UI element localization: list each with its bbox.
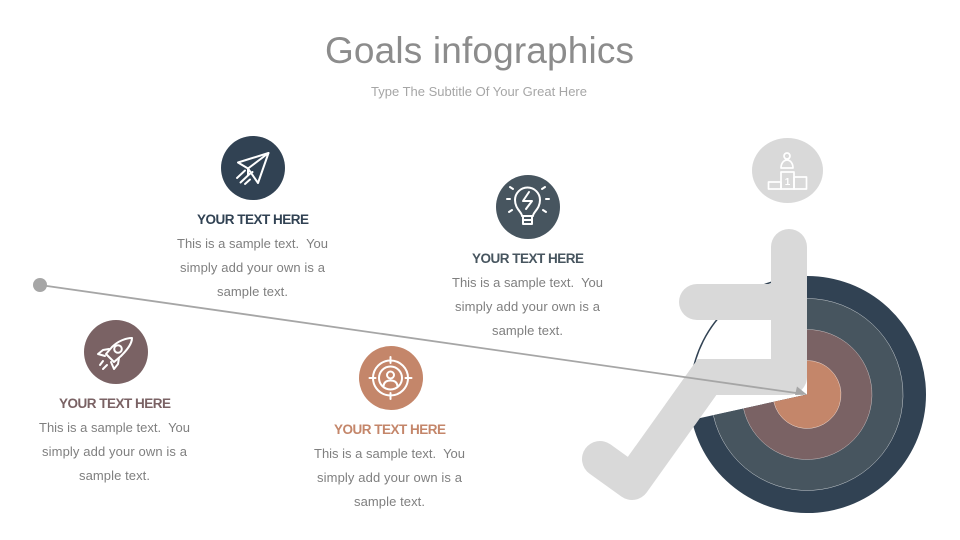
panel: top-left goal: [177, 136, 328, 299]
body text: simply add your own is a: [180, 260, 326, 275]
panel: lower-middle goal: [314, 346, 465, 509]
arrow: line from start dot to target centre: [33, 278, 807, 395]
heading: YOUR TEXT HERE: [197, 212, 309, 227]
body text: This is a sample text. You: [452, 275, 603, 290]
body text: simply add your own is a: [455, 299, 601, 314]
icon: paper plane: [221, 136, 285, 200]
body text: sample text.: [354, 494, 425, 509]
body text: sample text.: [79, 468, 150, 483]
body text: [314, 446, 465, 509]
heading: YOUR TEXT HERE: [472, 251, 584, 266]
icon: light bulb: [496, 175, 560, 239]
subtitle: Type The Subtitle Of Your Great Here: [371, 84, 587, 99]
body text: This is a sample text. You: [39, 420, 190, 435]
heading: YOUR TEXT HERE: [59, 396, 171, 411]
heading: YOUR TEXT HERE: [334, 422, 446, 437]
body text: [39, 420, 190, 483]
body text: This is a sample text. You: [314, 446, 465, 461]
panel: lower-left goal: [39, 320, 190, 483]
body text: sample text.: [217, 284, 288, 299]
body text: sample text.: [492, 323, 563, 338]
body text: [177, 236, 328, 299]
icon: target with person: [359, 346, 423, 410]
body text: [452, 275, 603, 338]
goal path: grey stepped route ending in a check mark: [600, 247, 789, 482]
target chart: concentric wedge rings: [691, 276, 926, 513]
icon: podium in grey circle: [752, 138, 823, 203]
title: Goals infographics: [325, 30, 634, 71]
icon: rocket: [84, 320, 148, 384]
panel: top-middle goal: [452, 175, 603, 338]
body text: This is a sample text. You: [177, 236, 328, 251]
body text: simply add your own is a: [317, 470, 463, 485]
body text: simply add your own is a: [42, 444, 188, 459]
icon: podium in grey circle: 1: [785, 177, 791, 188]
